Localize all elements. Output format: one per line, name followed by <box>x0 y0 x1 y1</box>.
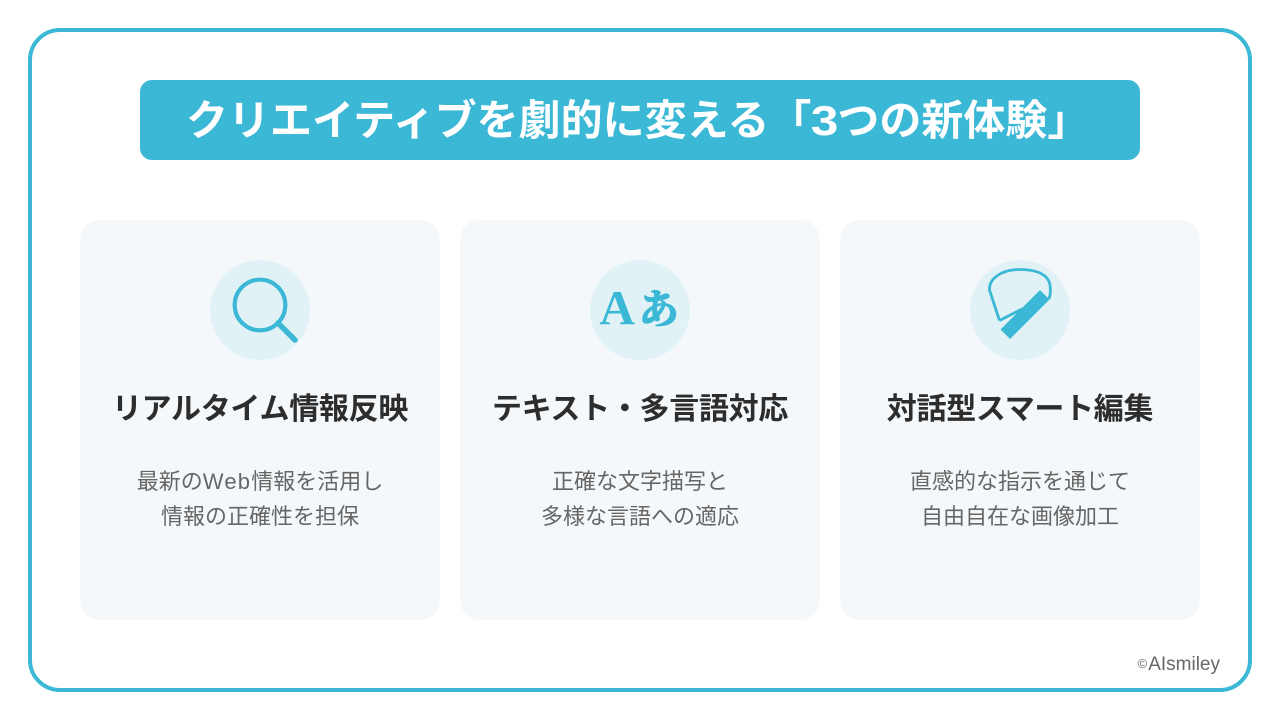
text: multilingual description <box>541 469 739 529</box>
icon: A and hiragana a <box>590 260 690 360</box>
title: 3 <box>811 97 839 144</box>
text: real-time description: 最新のWeb情報を活用し <box>137 469 383 494</box>
panel: real-time information <box>80 220 440 620</box>
text: multilingual description: 多様な言語への適応 <box>541 504 739 529</box>
heading: multilingual: テキスト・多言語対応 <box>492 393 788 426</box>
heading: real-time: リアルタイム情報反映 <box>112 393 408 426</box>
text: editing description: 直感的な指示を通じて <box>910 469 1130 494</box>
title: クリエイティブを劇的に変える「 つの新体験」 <box>186 97 1089 144</box>
text: editing description: 自由自在な画像加工 <box>921 504 1119 529</box>
panel: text and multilingual <box>460 220 820 620</box>
text: editing description <box>910 469 1130 529</box>
text: real-time description <box>137 469 383 529</box>
icon: pencil and speech shape <box>970 260 1070 360</box>
credit: ©AIsmiley <box>1138 654 1220 675</box>
icon: A and hiragana a: A <box>600 280 636 335</box>
text: multilingual description: 正確な文字描写と <box>552 469 728 494</box>
text: real-time description: 情報の正確性を担保 <box>161 504 359 529</box>
icon: A and hiragana a: あ <box>639 278 679 335</box>
icon: magnifying glass <box>210 260 310 360</box>
title <box>140 80 1140 160</box>
panel: conversational editing <box>840 220 1200 620</box>
heading: conversational editing: 対話型スマート編集 <box>887 393 1153 426</box>
